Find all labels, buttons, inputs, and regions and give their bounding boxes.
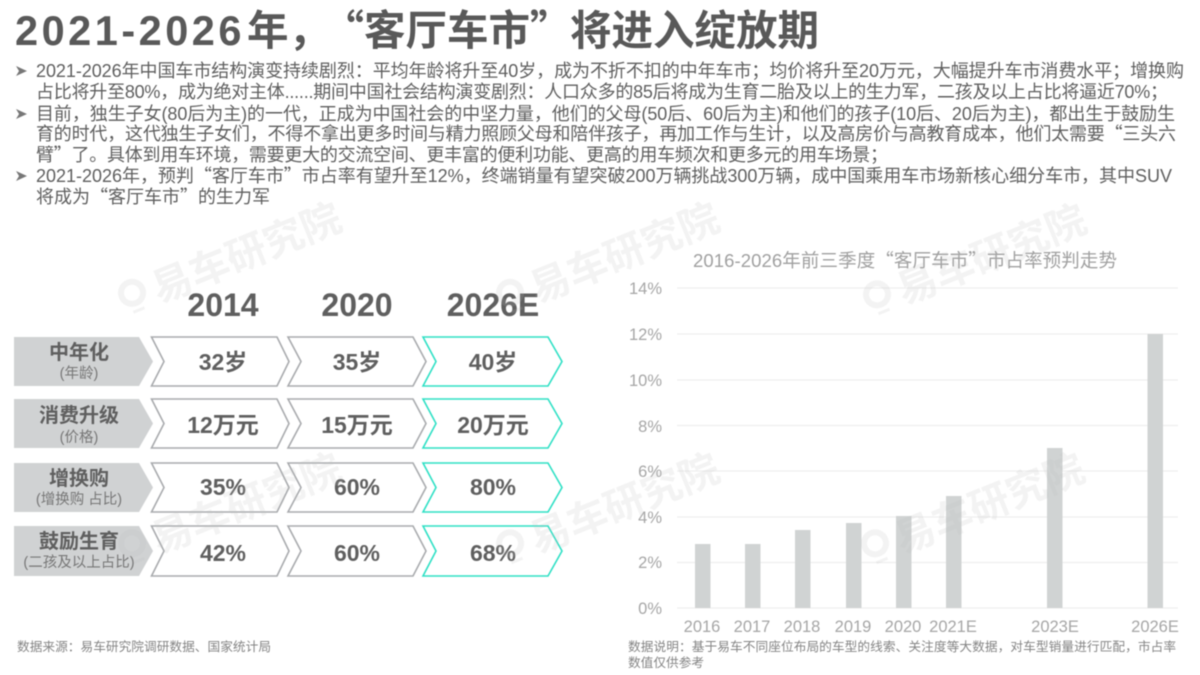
watermarks: 易车研究院 — [146, 447, 348, 562]
chevron table — [14, 337, 562, 576]
y axis: 2% — [638, 554, 662, 572]
y axis: 10% — [629, 372, 662, 390]
row: 鼓励生育: 60% — [334, 540, 380, 566]
row: 消费升级: 12万元 — [187, 412, 259, 438]
row: 消费升级 — [14, 399, 562, 448]
bullet 1: 占比将升至80%，成为绝对主体......期间中国社会结构演变剧烈：人口众多的85后将成为生育二胎及以上的生力军，二孩及以上占比将逼近70%； — [36, 82, 1168, 102]
x axis labels — [684, 618, 1179, 636]
data note: 数据说明：基于易车不同座位布局的车型的线索、关注度等大数据，对车型销量进行匹配，市占率 — [628, 639, 1176, 654]
row: 增换购: 80% — [470, 474, 516, 500]
x axis labels: 2016 — [684, 618, 720, 636]
bullet 3: 将成为“客厅车市”的生力军 — [36, 183, 270, 209]
x axis labels: 2017 — [734, 618, 770, 636]
bullet points — [16, 61, 1184, 209]
row: 中年化: 中年化 — [49, 341, 109, 364]
title: 将进入绽放期 — [570, 7, 819, 54]
x axis labels: 2026E — [1131, 618, 1179, 636]
y axis — [629, 280, 1178, 618]
y axis: 0% — [638, 600, 662, 618]
y axis: 8% — [638, 418, 662, 436]
source note: 数据来源：易车研究院调研数据、国家统计局 — [17, 639, 271, 654]
row: 鼓励生育 — [14, 526, 562, 576]
row: 增换购 — [14, 463, 562, 512]
row: 中年化: (年龄) — [60, 365, 98, 382]
bullet 2: 目前，独生子女(80后为主)的一代，正成为中国社会的中坚力量，他们的父母(50后、60后为主)和他们的孩子(10后、20后为主)，都出生于鼓励生 — [36, 104, 1175, 124]
column headings: 2020 — [321, 287, 393, 323]
row: 增换购: 35% — [200, 474, 246, 500]
bullet 3: 2021-2026年，预判“客厅车市”市占率有望升至12%，终端销量有望突破200万辆挑战300万辆，成中国乘用车市场新核心细分车市，其中SUV — [36, 162, 1172, 188]
column headings: 2026E — [447, 287, 539, 323]
row: 中年化: 35岁 — [333, 349, 381, 375]
row: 中年化: 32岁 — [199, 349, 247, 375]
row: 中年化: 40岁 — [469, 349, 517, 375]
row: 中年化 — [14, 337, 562, 386]
y axis: 6% — [638, 463, 662, 481]
row: 消费升级: 15万元 — [321, 412, 393, 438]
bullet 2 — [16, 104, 1176, 167]
x axis labels: 2019 — [835, 618, 871, 636]
bullet 1: 2021-2026年中国车市结构演变持续剧烈：平均年龄将升至40岁，成为不折不扣的中年车市；均价将升至20万元，大幅提升车市消费水平；增换购 — [36, 61, 1184, 81]
bullet 1 — [16, 61, 1184, 102]
column headings — [187, 287, 539, 323]
y axis: 14% — [629, 280, 662, 298]
data note: 数值仅供参考 — [628, 655, 704, 670]
row: 鼓励生育: 42% — [200, 540, 246, 566]
bullet 2: 臂”了。具体到用车环境，需要更大的交流空间、更丰富的便利功能、更高的用车频次和更多元的用车场景； — [36, 141, 888, 167]
row: 鼓励生育: 68% — [470, 540, 516, 566]
watermarks: 易车研究院 — [146, 196, 348, 312]
row: 增换购: 60% — [334, 474, 380, 500]
y axis: 12% — [629, 326, 662, 344]
title: 2021-2026 — [15, 7, 245, 54]
watermarks: 易车研究院 — [889, 447, 1091, 562]
x axis labels: 2020 — [885, 618, 921, 636]
bars — [695, 334, 1163, 608]
column headings: 2014 — [187, 287, 259, 323]
row: 鼓励生育: (二孩及以上占比) — [23, 554, 135, 571]
watermarks — [116, 196, 1093, 574]
row: 增换购: 增换购 — [49, 467, 109, 490]
title: 年， — [247, 7, 330, 54]
row: 消费升级: 20万元 — [457, 412, 529, 438]
watermarks: 易车研究院 — [524, 196, 726, 312]
row: 增换购: (增换购 占比) — [36, 491, 122, 508]
row: 消费升级: 消费升级 — [39, 404, 119, 427]
chart title: 2016-2026年前三季度“客厅车市”市占率预判走势 — [693, 247, 1117, 273]
row: 消费升级: (价格) — [60, 429, 98, 446]
bullet 2: 育的时代，这代独生子女们，不得不拿出更多时间与精力照顾父母和陪伴孩子，再加工作与生计，以及高房价与高教育成本，他们太需要“三头六 — [36, 120, 1176, 146]
x axis labels: 2018 — [784, 618, 820, 636]
bullet 3 — [16, 162, 1172, 209]
watermarks: 易车研究院 — [524, 447, 726, 562]
row: 鼓励生育: 鼓励生育 — [39, 529, 119, 553]
bar chart — [629, 280, 1179, 636]
watermarks: 易车研究院 — [891, 198, 1093, 313]
x axis labels: 2023E — [1031, 618, 1079, 636]
title: 客厅车市 — [364, 7, 530, 54]
data note — [628, 639, 1176, 670]
y axis: 4% — [638, 509, 662, 527]
x axis labels: 2021E — [929, 618, 977, 636]
